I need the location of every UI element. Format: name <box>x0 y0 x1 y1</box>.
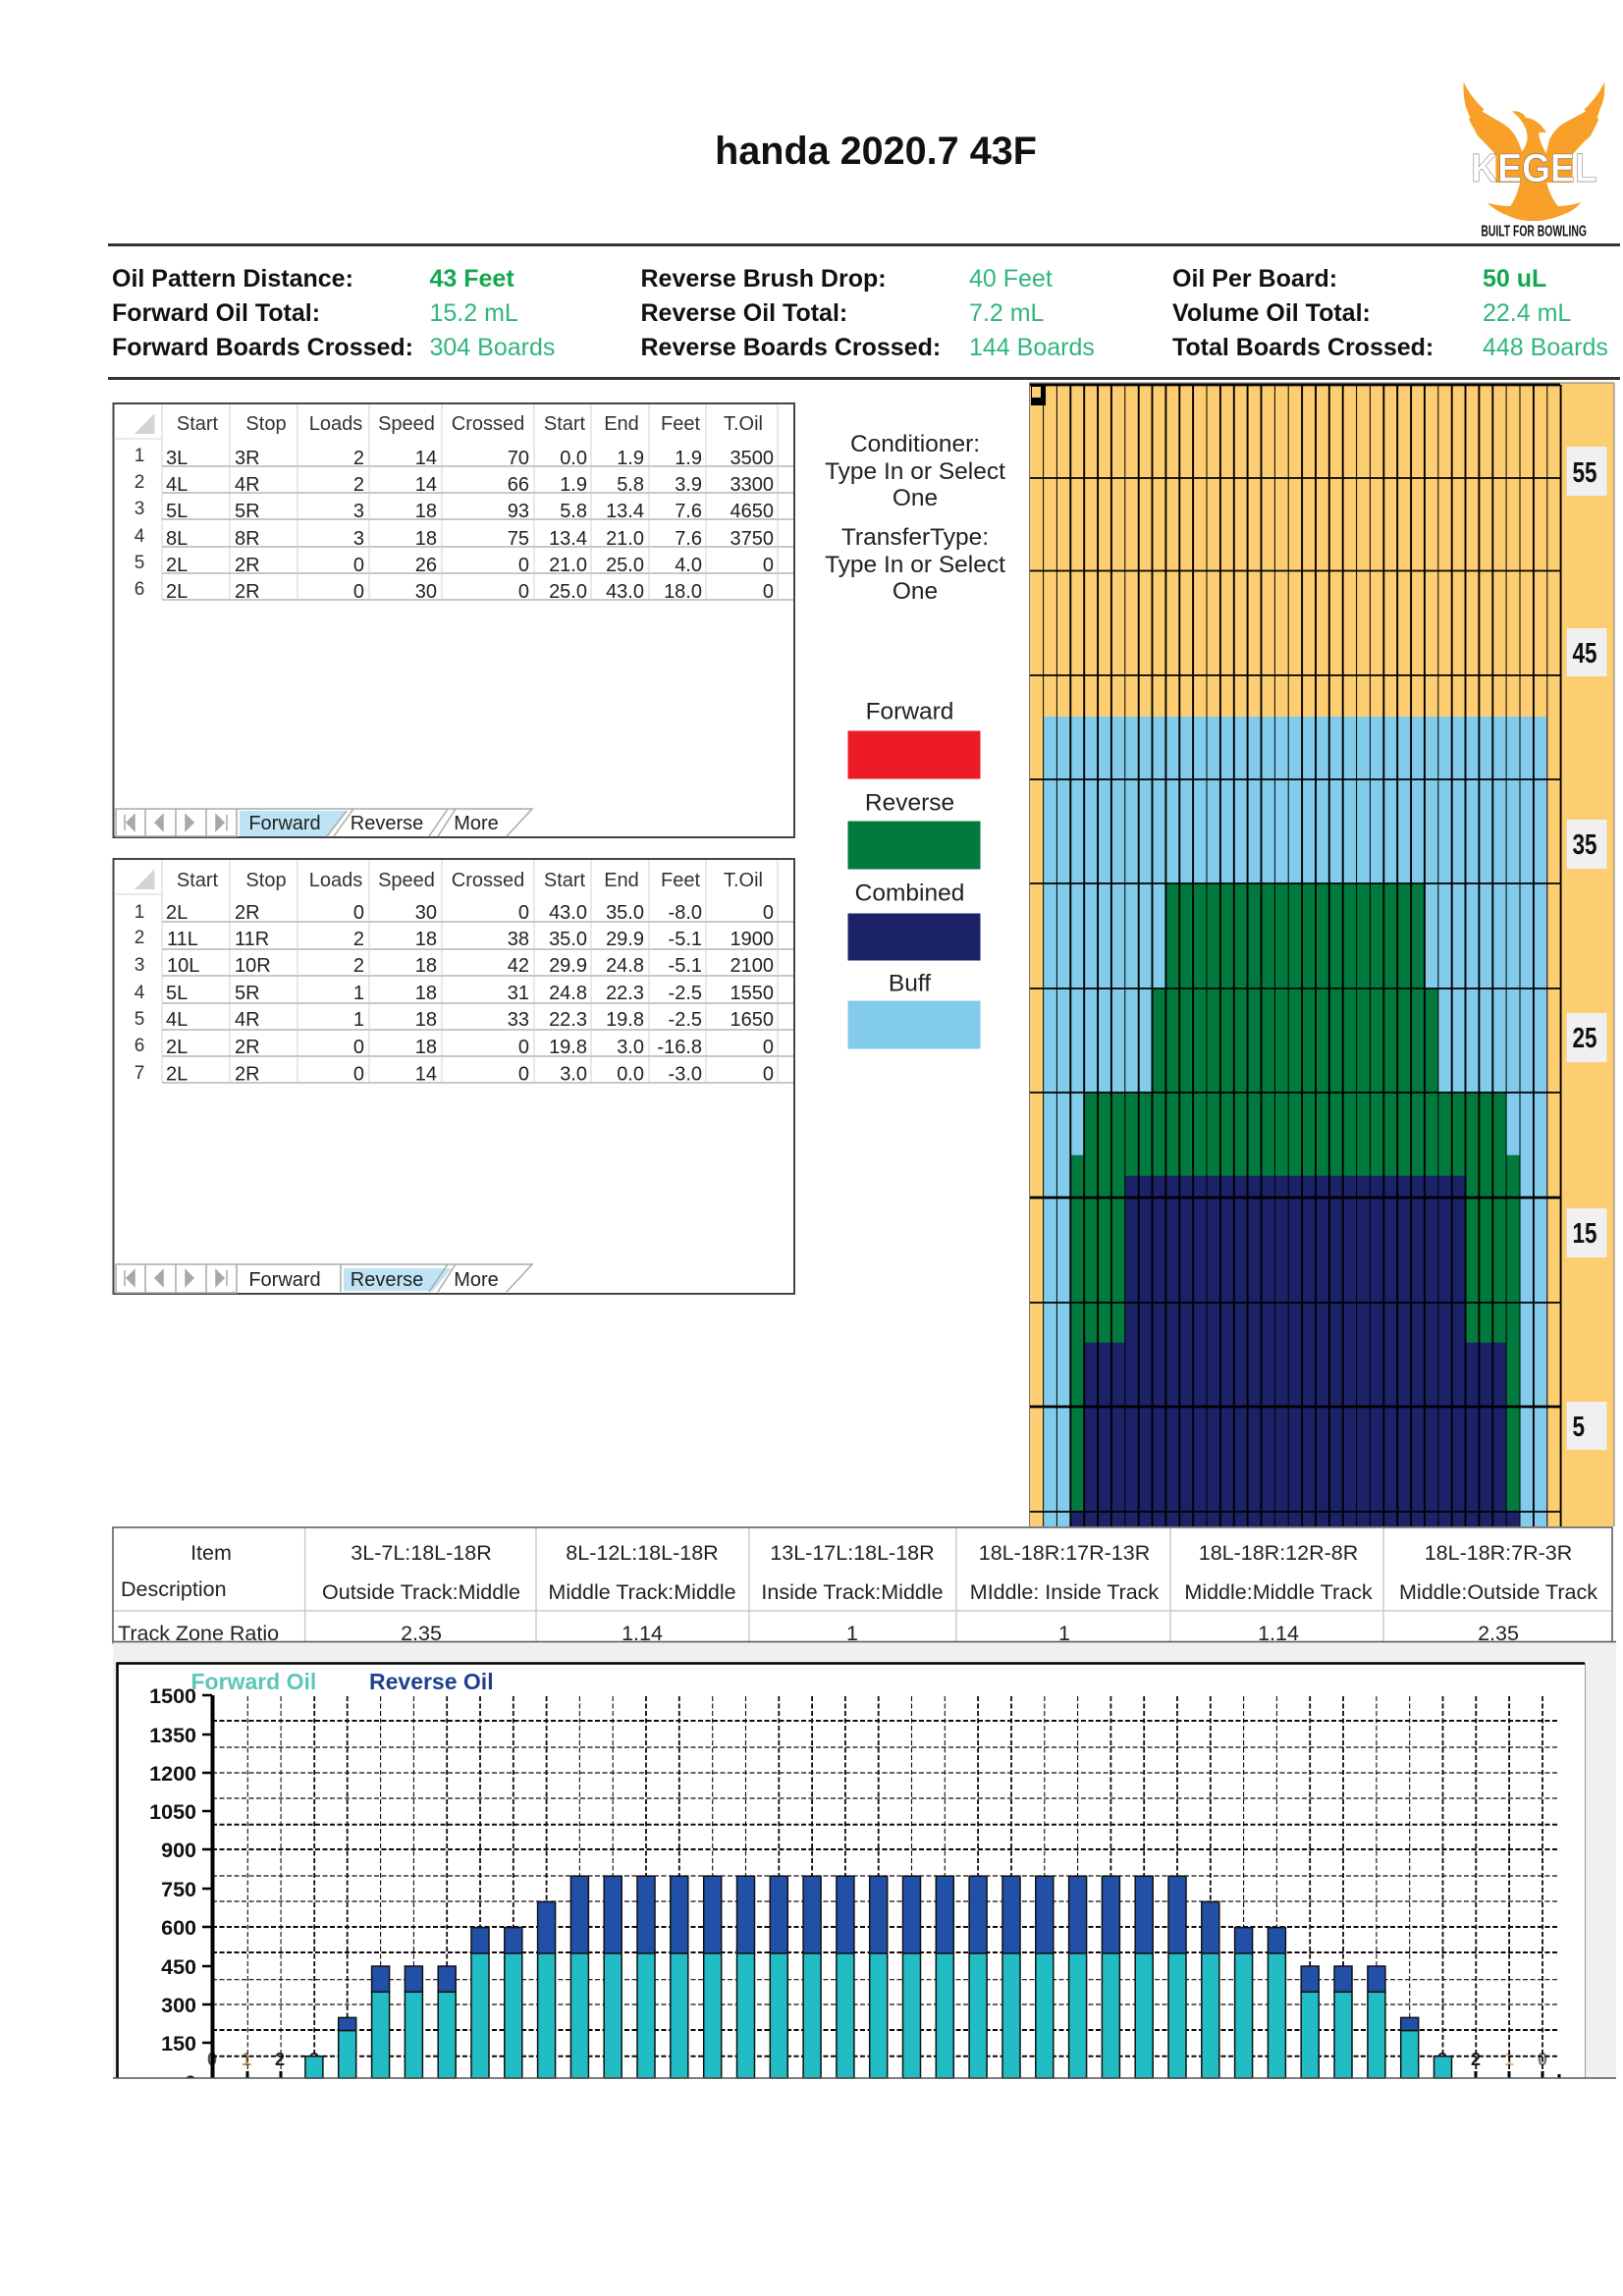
distance label: 15: 15 <box>1573 1218 1596 1250</box>
row 6: 2R <box>235 1037 260 1058</box>
row 2: 5.8 <box>617 474 644 496</box>
row 6: 2R <box>235 581 260 603</box>
bars: reverse oil <box>339 1876 1419 2030</box>
y axis: 1200 <box>149 1762 196 1786</box>
table header: Feet <box>661 870 700 891</box>
table header: Stop <box>245 870 287 891</box>
row: track zone ratio <box>118 1622 1519 1645</box>
row 4: 18 <box>415 528 437 550</box>
row 7: 14 <box>415 1064 437 1086</box>
row 1: 2L <box>166 902 188 924</box>
row: description: MIddle: Inside Track <box>970 1580 1159 1604</box>
row 6: 6 <box>135 1036 144 1056</box>
text block: transfer type: TransferType: <box>841 524 989 551</box>
row 6: 2L <box>166 1037 188 1058</box>
row 5: 33 <box>508 1009 529 1031</box>
table header: T.Oil <box>724 870 763 891</box>
sheet tabs: reverse active: Reverse <box>351 1269 423 1291</box>
stat: forward column: 304 Boards <box>430 334 555 361</box>
legend item: reverse <box>848 789 980 870</box>
y axis: 1500 <box>149 1684 196 1708</box>
row 1: 70 <box>508 448 529 469</box>
row 3: 7.6 <box>675 501 702 522</box>
row 2: 11R <box>235 929 269 950</box>
row 6: 25.0 <box>549 581 587 603</box>
table header: Feet <box>661 413 700 435</box>
stat: totals column: Volume Oil Total: <box>1172 299 1371 327</box>
row 4: 1550 <box>730 983 774 1004</box>
table header: Start <box>177 413 219 435</box>
row 6: 30 <box>415 581 437 603</box>
track zone ratio table <box>113 1527 1612 1645</box>
row: item: 3L-7L:18L-18R <box>351 1541 492 1565</box>
row: description: Middle:Outside Track <box>1399 1580 1597 1604</box>
row 5: 5 <box>135 1009 144 1030</box>
row 2: 66 <box>508 474 529 496</box>
row 3: 2 <box>353 955 364 977</box>
table header: Start <box>544 870 586 891</box>
x axis board numbers: 3 <box>1437 2050 1447 2069</box>
distance label: 55 <box>1567 447 1606 496</box>
row 4: 7.6 <box>675 528 702 550</box>
panel: reverse loads table <box>114 859 794 1294</box>
row 2: 1900 <box>730 929 774 950</box>
row 3: 5.8 <box>560 501 587 522</box>
stat: reverse column: Reverse Boards Crossed: <box>640 334 941 361</box>
row 5: 4L <box>166 1009 188 1031</box>
row 5: 0 <box>763 555 774 576</box>
row 6 <box>135 1036 774 1058</box>
sheet tabs: reverse active: Forward <box>248 1269 321 1291</box>
stat: reverse column: 40 Feet <box>969 265 1053 293</box>
y axis: 0 <box>185 2071 196 2095</box>
x axis board numbers: 1 <box>1504 2050 1514 2069</box>
row 2: 2 <box>135 472 144 493</box>
y axis: 750 <box>161 1878 196 1901</box>
y axis: 900 <box>161 1839 196 1862</box>
row: description: Inside Track:Middle <box>761 1580 944 1604</box>
stat: totals column: 50 uL <box>1483 265 1546 293</box>
row 1 <box>135 902 774 924</box>
row: item: 18L-18R:7R-3R <box>1425 1541 1572 1565</box>
x axis board numbers: 0 <box>1538 2050 1547 2069</box>
row 2: 2 <box>135 928 144 948</box>
header rule <box>108 243 1620 246</box>
row 4: 3750 <box>730 528 774 550</box>
row 2: 2 <box>353 474 364 496</box>
row 1: 0 <box>518 902 529 924</box>
row 3: 42 <box>508 955 529 977</box>
x axis board numbers: 3 <box>309 2050 319 2069</box>
row 3 <box>135 499 774 522</box>
legend item: buff: Buff <box>889 970 931 997</box>
row 3: -5.1 <box>669 955 702 977</box>
table header: T.Oil <box>724 413 763 435</box>
row 2: 35.0 <box>549 929 587 950</box>
legend item: combined: Combined <box>855 880 964 907</box>
row 2: 4L <box>166 474 188 496</box>
row 1: 2R <box>235 902 260 924</box>
table header: End <box>604 413 639 435</box>
row: track zone ratio: 1.14 <box>622 1622 663 1645</box>
sheet tabs: forward active <box>116 809 532 836</box>
row 6: 18 <box>415 1037 437 1058</box>
row: item <box>190 1541 1572 1565</box>
row: track zone ratio: 2.35 <box>1478 1622 1519 1645</box>
stat: reverse column: Reverse Brush Drop: <box>640 265 887 293</box>
row 5: 2R <box>235 555 260 576</box>
row 4: 18 <box>415 983 437 1004</box>
table header: Crossed <box>452 413 524 435</box>
logo: Kegel phoenix: KEGEL <box>1471 145 1597 190</box>
row 7: 7 <box>135 1063 144 1084</box>
row 6: 0 <box>763 1037 774 1058</box>
distance label: 45: 45 <box>1573 638 1596 669</box>
chart legend: forward oil: Forward Oil <box>190 1669 316 1694</box>
row 4: 5R <box>235 983 260 1004</box>
row: item: 18L-18R:12R-8R <box>1199 1541 1358 1565</box>
distance label: 5: 5 <box>1573 1412 1585 1443</box>
row 7: 0.0 <box>617 1064 644 1086</box>
row 3: 18 <box>415 955 437 977</box>
row 3: 2100 <box>730 955 774 977</box>
stat: reverse column: 144 Boards <box>969 334 1095 361</box>
legend: lane colours <box>848 699 980 1048</box>
table header: Start <box>544 413 586 435</box>
row 3: 3 <box>135 955 144 976</box>
stat: reverse column: 7.2 mL <box>969 299 1045 327</box>
row 5: 1 <box>353 1009 364 1031</box>
row 5: 19.8 <box>606 1009 644 1031</box>
row 3: 18 <box>415 501 437 522</box>
row 6: 6 <box>135 579 144 600</box>
row: description: Middle:Middle Track <box>1184 1580 1373 1604</box>
row 2: 3300 <box>730 474 774 496</box>
row 5: 4R <box>235 1009 260 1031</box>
stat: totals column: 22.4 mL <box>1483 299 1571 327</box>
row 5: 1650 <box>730 1009 774 1031</box>
text block: transfer type: Type In or Select <box>825 552 1005 578</box>
legend item: forward: Forward <box>866 699 953 724</box>
stat: forward column: Forward Boards Crossed: <box>112 334 413 361</box>
row 1: 3L <box>166 448 188 469</box>
buff zone <box>1044 717 1547 1526</box>
row 1: 0 <box>763 902 774 924</box>
row 3: 93 <box>508 501 529 522</box>
stat: totals column <box>1172 265 1608 361</box>
row 6 <box>135 579 774 603</box>
row 5 <box>135 1009 774 1031</box>
row 7: 2R <box>235 1064 260 1086</box>
distance label: 45 <box>1567 628 1606 676</box>
legend item: combined <box>848 880 980 960</box>
row: item: 18L-18R:17R-13R <box>979 1541 1150 1565</box>
row 6: 18.0 <box>664 581 702 603</box>
row 2 <box>135 928 774 950</box>
row 6: 43.0 <box>606 581 644 603</box>
row 3: 10R <box>235 955 271 977</box>
row: track zone ratio: Track Zone Ratio <box>118 1622 279 1645</box>
row 4 <box>135 526 774 550</box>
row 6: 0 <box>518 581 529 603</box>
x axis board numbers <box>207 2050 1547 2069</box>
distance label: 5 <box>1567 1402 1606 1450</box>
stat: reverse column: Reverse Oil Total: <box>640 299 847 327</box>
x axis board numbers: 1 <box>242 2050 251 2069</box>
row 3: 24.8 <box>606 955 644 977</box>
stat: totals column: 448 Boards <box>1483 334 1608 361</box>
row 5: 2L <box>166 555 188 576</box>
distance label: 15 <box>1567 1208 1606 1257</box>
stat: forward column: 43 Feet <box>430 265 514 293</box>
row 2: 29.9 <box>606 929 644 950</box>
row 1: 43.0 <box>549 902 587 924</box>
y axis: 300 <box>161 1994 196 2017</box>
row 2: 4R <box>235 474 260 496</box>
sheet tabs: forward active: More <box>454 813 499 834</box>
row 5: 0 <box>518 555 529 576</box>
row: item: 13L-17L:18L-18R <box>770 1541 935 1565</box>
row: description: Outside Track:Middle <box>322 1580 520 1604</box>
y axis: 450 <box>161 1955 196 1979</box>
row 1: 2 <box>353 448 364 469</box>
table header: Loads <box>309 870 362 891</box>
row 1: 30 <box>415 902 437 924</box>
row 2: 14 <box>415 474 437 496</box>
row 1: 1.9 <box>675 448 702 469</box>
panel: oil per board bar chart <box>98 1641 1623 2109</box>
row 3: 10L <box>167 955 199 977</box>
row 4: -2.5 <box>669 983 702 1004</box>
row 4: 3 <box>353 528 364 550</box>
stats block <box>112 265 1608 361</box>
row 4: 1 <box>353 983 364 1004</box>
title: handa 2020.7 43F <box>715 130 1037 173</box>
logo: Kegel phoenix <box>1463 81 1604 240</box>
distance label: 55: 55 <box>1573 457 1596 489</box>
row 4: 8R <box>235 528 260 550</box>
table header: Crossed <box>452 870 524 891</box>
stat: totals column: Oil Per Board: <box>1172 265 1337 293</box>
stats bottom rule <box>108 377 1620 380</box>
row 4: 75 <box>508 528 529 550</box>
row 4: 4 <box>135 983 145 1003</box>
stat: forward column: Oil Pattern Distance: <box>112 265 353 293</box>
row 7 <box>135 1063 774 1086</box>
table header: Loads <box>309 413 362 435</box>
panel: forward loads table <box>114 403 794 837</box>
row: item: Item <box>190 1541 232 1565</box>
row 7: 0 <box>518 1064 529 1086</box>
row 2: 38 <box>508 929 529 950</box>
row 3: 5L <box>166 501 188 522</box>
text block: transfer type <box>825 524 1005 605</box>
row 4: 31 <box>508 983 529 1004</box>
bars: forward oil <box>305 1953 1451 2078</box>
grid cursor marker <box>1031 385 1046 405</box>
y axis: 1050 <box>149 1800 196 1824</box>
row 3: 3 <box>135 499 144 519</box>
table header: Speed <box>378 413 435 435</box>
row 3: 13.4 <box>606 501 644 522</box>
table header: Stop <box>245 413 287 435</box>
distance label: 25 <box>1567 1013 1606 1062</box>
distance label: 35: 35 <box>1573 829 1596 861</box>
row 1: 14 <box>415 448 437 469</box>
row 1: 3R <box>235 448 260 469</box>
reverse zone <box>1070 883 1520 1526</box>
row: track zone ratio: 1.14 <box>1258 1622 1299 1645</box>
lane oil pattern graph <box>1029 383 1614 1526</box>
row 2: 3.9 <box>675 474 702 496</box>
row 2: 18 <box>415 929 437 950</box>
sheet tabs: forward active: Reverse <box>351 813 423 834</box>
row 4 <box>135 983 774 1004</box>
row 1: 0.0 <box>560 448 587 469</box>
row 4: 5L <box>166 983 188 1004</box>
row 3 <box>135 955 774 977</box>
row 5: 0 <box>353 555 364 576</box>
row 2: 11L <box>167 929 198 950</box>
x axis board numbers: 0 <box>207 2050 217 2069</box>
row 4: 24.8 <box>549 983 587 1004</box>
row 5: -2.5 <box>669 1009 702 1031</box>
row 3: 3 <box>353 501 364 522</box>
row 1: 1.9 <box>617 448 644 469</box>
distance label: 25: 25 <box>1573 1023 1596 1054</box>
row 5 <box>135 553 774 576</box>
row 5: 25.0 <box>606 555 644 576</box>
row 6: 0 <box>353 1037 364 1058</box>
row 7: 3.0 <box>560 1064 587 1086</box>
row 2: 1.9 <box>560 474 587 496</box>
row 4: 21.0 <box>606 528 644 550</box>
row 1 <box>135 446 774 469</box>
y axis: 600 <box>161 1916 196 1940</box>
row 4: 13.4 <box>549 528 587 550</box>
row 5: 4.0 <box>675 555 702 576</box>
board grid <box>1030 385 1561 1526</box>
x axis tick stubs <box>247 2071 1559 2078</box>
row 5: 21.0 <box>549 555 587 576</box>
text block: transfer type: One <box>893 578 938 605</box>
y axis <box>149 1684 212 2095</box>
row: track zone ratio: 2.35 <box>401 1622 442 1645</box>
row 1: 35.0 <box>606 902 644 924</box>
row: track zone ratio: 1 <box>846 1622 858 1645</box>
legend item: buff <box>848 970 980 1048</box>
legend item: reverse: Reverse <box>865 789 954 817</box>
row 6: 19.8 <box>549 1037 587 1058</box>
row 1: 0 <box>353 902 364 924</box>
row 6: 0 <box>353 581 364 603</box>
row: item: 8L-12L:18L-18R <box>566 1541 719 1565</box>
row 1: 1 <box>135 902 144 923</box>
row 1: -8.0 <box>669 902 702 924</box>
row 4: 4 <box>135 526 145 547</box>
text block: conditioner: One <box>893 485 938 511</box>
y axis: 150 <box>161 2032 196 2056</box>
row 6: -16.8 <box>657 1037 702 1058</box>
row 5: 5 <box>135 553 144 573</box>
row: description: Description <box>121 1577 227 1601</box>
row 3: 29.9 <box>549 955 587 977</box>
row 5: 18 <box>415 1009 437 1031</box>
row 1: 1 <box>135 446 144 466</box>
row 7: 2L <box>166 1064 188 1086</box>
stat: forward column: 15.2 mL <box>430 299 518 327</box>
text block: conditioner: Type In or Select <box>825 458 1005 485</box>
legend item: forward <box>848 699 980 779</box>
row: description <box>121 1577 1597 1604</box>
table header <box>177 413 763 435</box>
x axis board numbers: 2 <box>275 2050 285 2069</box>
stat: forward column: Forward Oil Total: <box>112 299 320 327</box>
table header: Start <box>177 870 219 891</box>
text block: conditioner <box>825 431 1005 511</box>
row: track zone ratio: 1 <box>1058 1622 1070 1645</box>
row 5: 22.3 <box>549 1009 587 1031</box>
table header: End <box>604 870 639 891</box>
row 6: 0 <box>518 1037 529 1058</box>
row 7: 0 <box>763 1064 774 1086</box>
text block: conditioner: Conditioner: <box>850 431 980 457</box>
distance label: 35 <box>1567 820 1606 869</box>
row 4: 22.3 <box>606 983 644 1004</box>
row 2 <box>135 472 774 496</box>
y axis: 1350 <box>149 1724 196 1747</box>
row 5: 26 <box>415 555 437 576</box>
row 7: -3.0 <box>669 1064 702 1086</box>
chart gridlines <box>212 1696 1558 2078</box>
sheet tabs: reverse active <box>116 1264 532 1293</box>
sheet tabs: reverse active: More <box>454 1269 499 1291</box>
row 7: 0 <box>353 1064 364 1086</box>
row: description: Middle Track:Middle <box>548 1580 736 1604</box>
x axis board numbers: 2 <box>1471 2050 1481 2069</box>
table header <box>177 870 763 891</box>
row 4: 8L <box>166 528 188 550</box>
row 3: 5R <box>235 501 260 522</box>
row 3: 4650 <box>730 501 774 522</box>
clipped zone below chart <box>98 2079 1623 2109</box>
stat: totals column: Total Boards Crossed: <box>1172 334 1434 361</box>
table header: Speed <box>378 870 435 891</box>
stat: reverse column <box>640 265 1095 361</box>
sheet tabs: forward active: Forward <box>248 813 321 834</box>
combined zone <box>1070 1176 1520 1526</box>
row 2: 2 <box>353 929 364 950</box>
row 6: 0 <box>763 581 774 603</box>
chart legend: reverse oil: Reverse Oil <box>369 1669 494 1694</box>
row 6: 3.0 <box>617 1037 644 1058</box>
row 2: -5.1 <box>669 929 702 950</box>
row 6: 2L <box>166 581 188 603</box>
row 1: 3500 <box>730 448 774 469</box>
stat: forward column <box>112 265 555 361</box>
